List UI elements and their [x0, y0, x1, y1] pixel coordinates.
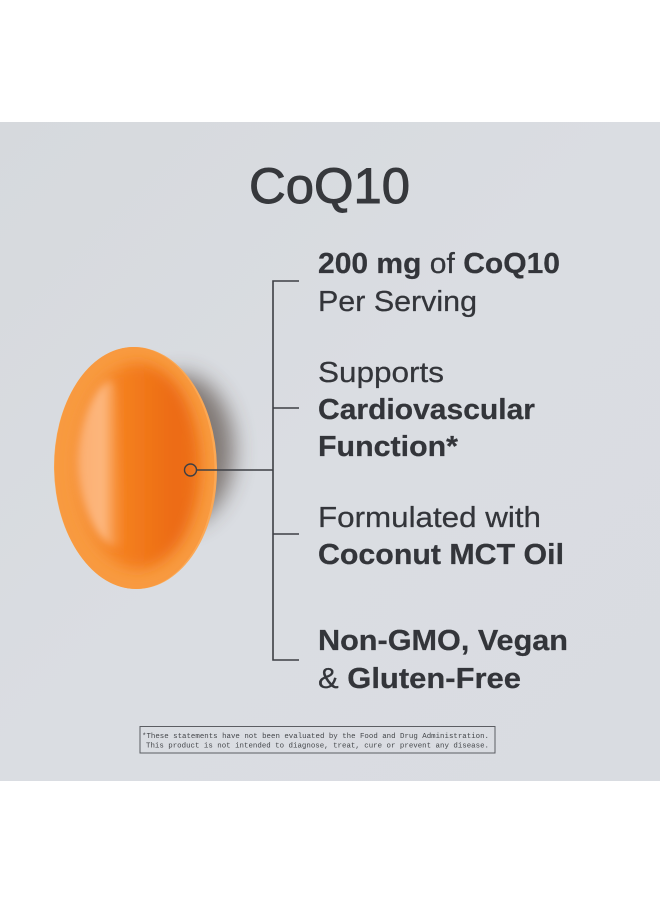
disclaimer box: *These statements have not been evaluated by the Food and Drug Administration. — [142, 733, 489, 741]
disclaimer box — [140, 726, 495, 753]
title: CoQ10 — [249, 158, 410, 214]
text block: non-GMO: Non-GMO, Vegan — [318, 625, 568, 657]
text block: non-GMO — [318, 625, 568, 695]
text block: cardiovascular: Supports — [318, 357, 444, 389]
icon: orange softgel capsule — [52, 346, 234, 590]
background panel — [0, 122, 660, 781]
text block: cardiovascular: Function* — [318, 431, 459, 463]
text block: coconut MCT oil: Formulated with — [318, 502, 541, 534]
capsule rim — [52, 346, 219, 590]
text block: 200 mg: Per Serving — [318, 286, 477, 318]
capsule body — [52, 346, 217, 590]
text block: coconut MCT oil — [318, 502, 564, 571]
text block: coconut MCT oil: Coconut MCT Oil — [318, 539, 564, 571]
text block: 200 mg: 200 mg of CoQ10 — [318, 248, 560, 280]
text block: cardiovascular: Cardiovascular — [318, 394, 535, 426]
text block: non-GMO: & Gluten-Free — [318, 663, 521, 695]
disclaimer box: This product is not intended to diagnose, treat, cure or prevent any disease. — [146, 742, 489, 750]
connector bracket — [184, 281, 299, 660]
text block: 200 mg — [318, 248, 560, 318]
callout marker — [184, 464, 196, 476]
capsule centre — [75, 363, 201, 569]
capsule shadow — [126, 374, 234, 526]
capsule highlight — [78, 380, 125, 547]
text block: cardiovascular — [318, 357, 535, 463]
